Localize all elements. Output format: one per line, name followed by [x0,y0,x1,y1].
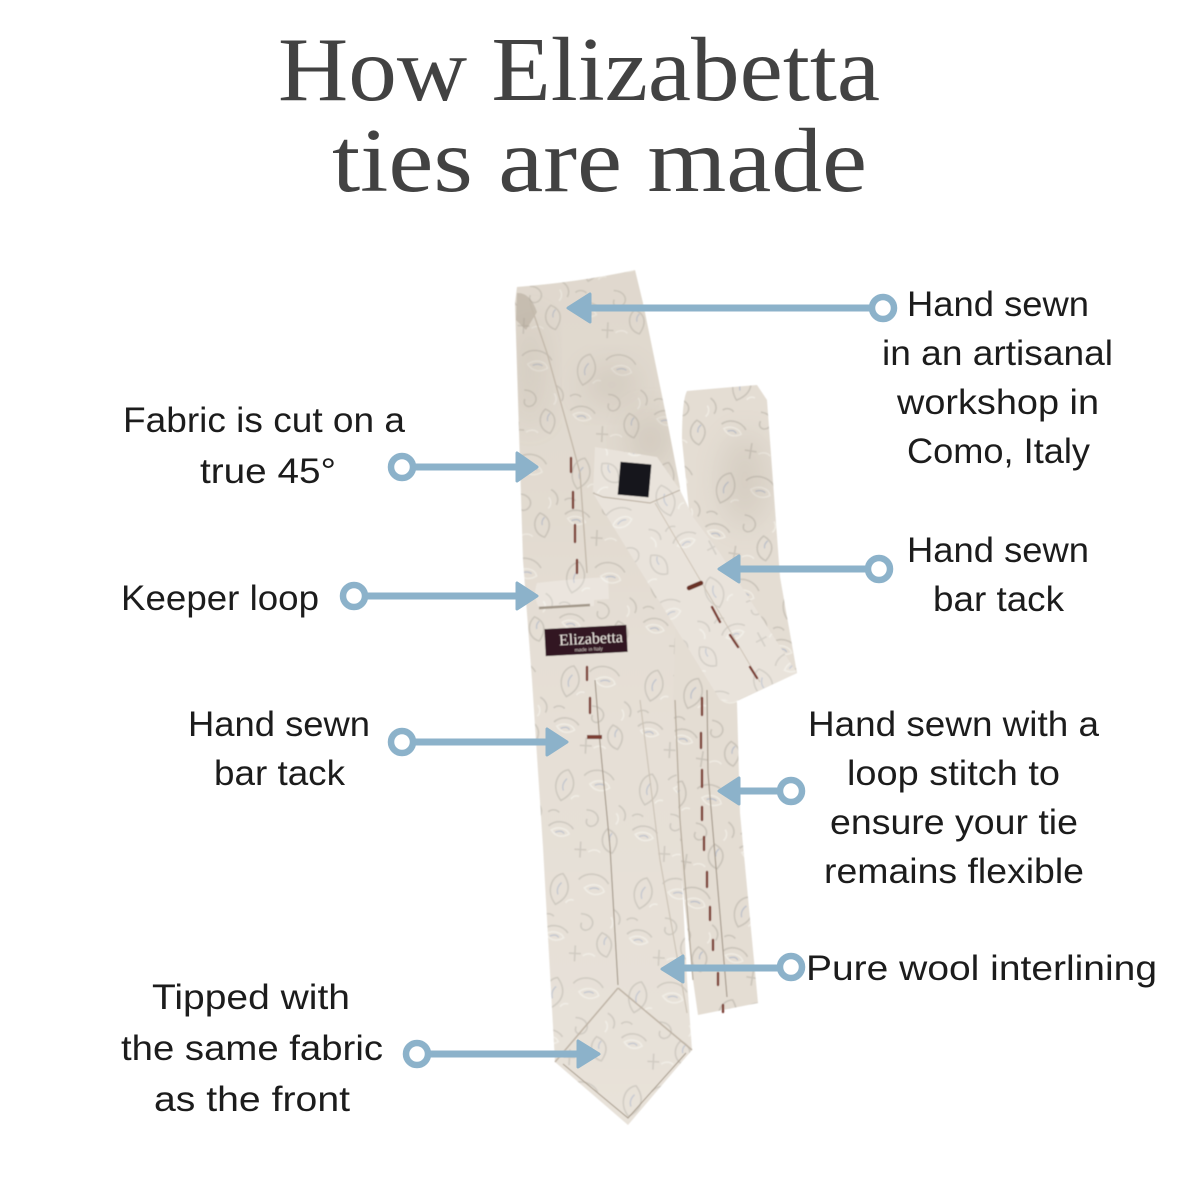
text: interlining: Pure wool interlining [806,949,1157,988]
main wide blade [514,270,692,1125]
title: How Elizabetta [278,19,880,120]
text: loop stitch [808,705,1100,891]
text: left bar tack: bar tack [214,754,346,793]
arrow: hand sewn workshop [568,294,894,322]
text: tipped: Tipped with [152,978,350,1017]
text: loop stitch: loop stitch to [847,754,1060,793]
text: hand sewn in an artisanal workshop [882,285,1113,471]
brand label [544,625,628,656]
text: tipped: as the front [154,1080,350,1119]
text: right bar tack: bar tack [933,580,1065,619]
text: loop stitch: ensure your tie [830,803,1078,842]
text: loop stitch: Hand sewn with a [808,705,1100,744]
title [278,19,880,211]
text: right bar tack: Hand sewn [907,531,1089,570]
title: ties are made [332,110,867,211]
text: left bar tack [188,705,370,793]
text: fabric cut: true 45° [200,452,336,491]
text: fabric cut [123,401,406,491]
keeper loop [535,577,609,609]
arrow: right bar tack [719,556,890,582]
upper narrow blade behind [682,384,797,701]
text: keeper loop: Keeper loop [121,579,319,618]
text: hand sewn in an artisanal workshop: Hand sewn [907,285,1089,324]
tie illustration [514,270,810,1125]
brand label: made in Italy [574,646,604,654]
text: hand sewn in an artisanal workshop: in an artisanal [882,334,1113,373]
brand label: Elizabetta [559,629,623,649]
arrow: tipped [406,1041,599,1067]
arrow: interlining [662,956,802,982]
lower narrow tail [650,590,758,1015]
text: right bar tack [907,531,1089,619]
text: left bar tack: Hand sewn [188,705,370,744]
arrow: loop stitch [719,778,802,804]
text: hand sewn in an artisanal workshop: workshop in [896,383,1099,422]
bar tack [587,735,602,739]
folded narrow strip [593,447,797,702]
text: fabric cut: Fabric is cut on a [123,401,406,440]
arrow: left bar tack [391,729,567,755]
text: hand sewn in an artisanal workshop: Como, Italy [907,432,1091,471]
arrow: fabric cut [391,453,537,481]
text: tipped: the same fabric [121,1029,383,1068]
arrow: keeper loop [343,583,537,609]
care tag [618,462,651,497]
text: loop stitch: remains flexible [824,852,1084,891]
text: tipped [121,978,383,1119]
